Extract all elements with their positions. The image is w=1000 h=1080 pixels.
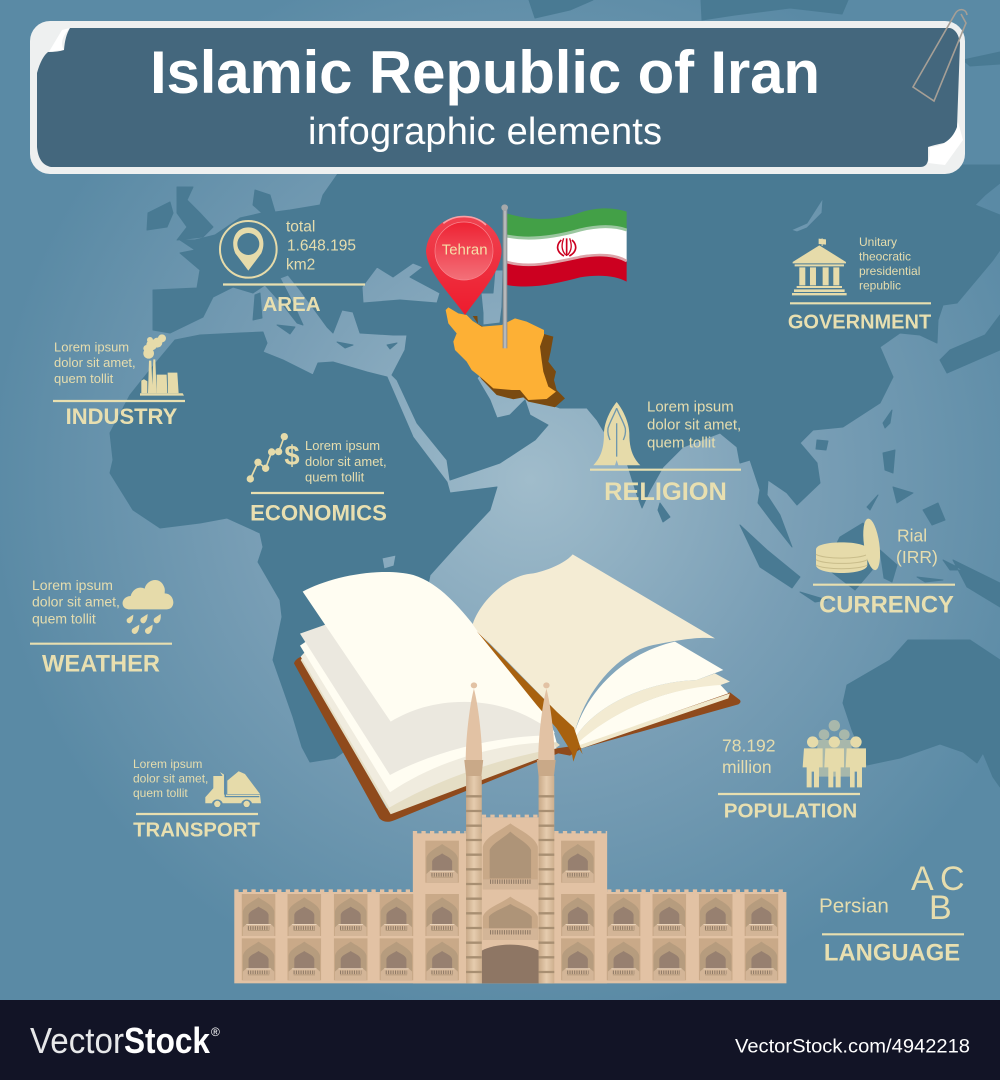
government text: theocratic <box>859 250 911 264</box>
icon: rain cloud <box>123 580 173 634</box>
subtitle: infographic elements <box>308 111 662 153</box>
icon: letters: B <box>929 889 952 927</box>
main title: Islamic Republic of Iran <box>150 39 820 106</box>
book <box>294 554 741 822</box>
icon: government building <box>792 238 847 295</box>
mosque windows <box>242 841 778 980</box>
industry text: quem tollit <box>54 371 114 386</box>
map: Asian islands <box>658 410 1000 607</box>
flag emblem <box>558 238 576 256</box>
economics text: quem tollit <box>305 470 365 484</box>
map pin: Tehran <box>426 216 502 315</box>
industry text: Lorem ipsum <box>54 340 129 354</box>
population block <box>718 720 866 822</box>
transport text: dolor sit amet, <box>133 772 208 786</box>
map: Australia <box>843 640 1000 787</box>
economics block <box>247 433 387 526</box>
world map <box>110 0 1000 787</box>
economics text: dolor sit amet, <box>305 454 387 469</box>
area text: 1.648.195 <box>287 238 356 254</box>
right top page <box>473 554 715 732</box>
religion heading: RELIGION <box>604 478 727 506</box>
mosque walls <box>234 817 786 983</box>
industry heading: INDUSTRY <box>66 404 178 429</box>
map: Japan <box>940 315 1000 373</box>
icon: growth chart and dollar: $ <box>284 440 300 471</box>
government heading: GOVERNMENT <box>788 312 931 334</box>
government text: republic <box>859 278 901 292</box>
map pin: Tehran: Tehran <box>442 242 488 259</box>
transport block <box>133 757 261 842</box>
government text: Unitary <box>859 235 897 249</box>
currency heading: CURRENCY <box>819 592 954 619</box>
language block <box>819 860 965 967</box>
transport text: Lorem ipsum <box>133 757 202 771</box>
book cover <box>294 657 741 822</box>
transport text: quem tollit <box>133 786 188 800</box>
flag pole <box>503 210 507 348</box>
map: land above the banner <box>529 0 1000 66</box>
icon: growth chart and dollar <box>247 433 300 483</box>
flag and pole <box>501 204 627 348</box>
currency block <box>813 518 955 619</box>
footer bar <box>0 1000 1000 1080</box>
map: Africa <box>110 332 497 762</box>
map: European and Mediterranean islands <box>147 187 397 349</box>
book spine ribbon <box>477 631 583 762</box>
icon: factory <box>140 334 184 396</box>
VectorStock logo: Vector <box>30 1020 124 1061</box>
left top page <box>303 572 555 733</box>
title banner <box>30 10 967 174</box>
economics text: Lorem ipsum <box>305 438 380 453</box>
language text: Persian <box>819 895 889 918</box>
industry block <box>53 334 185 429</box>
area block <box>220 218 365 316</box>
icon: letters: A <box>911 860 934 898</box>
religion text: quem tollit <box>647 434 716 452</box>
area text: total <box>286 218 315 236</box>
icon: dump truck <box>205 771 261 808</box>
image id: VectorStock.com/4942218 <box>735 1036 970 1058</box>
industry text: dolor sit amet, <box>54 355 136 370</box>
VectorStock logo <box>30 1020 220 1061</box>
icon: people <box>803 720 866 787</box>
economics heading: ECONOMICS <box>250 500 387 526</box>
population text: 78.192 <box>722 736 776 756</box>
transport heading: TRANSPORT <box>133 820 260 842</box>
weather text: dolor sit amet, <box>32 594 120 610</box>
Iran map <box>446 307 565 407</box>
weather heading: WEATHER <box>42 652 160 678</box>
government block <box>788 235 931 334</box>
VectorStock logo: Stock <box>124 1020 211 1061</box>
currency text: (IRR) <box>896 547 938 567</box>
currency text: Rial <box>897 526 927 546</box>
language heading: LANGUAGE <box>824 940 960 967</box>
population heading: POPULATION <box>724 799 857 822</box>
religion block <box>590 398 741 506</box>
flag of Iran <box>507 208 627 286</box>
icon: praying hands <box>593 402 640 465</box>
population text: million <box>722 757 772 777</box>
area heading: AREA <box>262 293 321 316</box>
map: Eurasia <box>153 165 1000 547</box>
central arches <box>482 823 539 983</box>
mosque <box>234 682 786 983</box>
minarets <box>464 682 556 983</box>
government text: presidential <box>859 264 920 278</box>
icon: letters: C <box>940 860 965 898</box>
right page stack <box>577 693 730 748</box>
left page stack <box>301 625 560 814</box>
icon: paper clip <box>913 10 967 101</box>
religion text: Lorem ipsum <box>647 398 734 416</box>
icon: area pin <box>220 221 277 278</box>
icon: coins <box>816 518 883 573</box>
area text: km2 <box>286 256 315 274</box>
weather block <box>30 577 173 678</box>
VectorStock logo: ® <box>211 1025 220 1039</box>
weather text: quem tollit <box>32 610 96 626</box>
weather text: Lorem ipsum <box>32 577 113 593</box>
religion text: dolor sit amet, <box>647 416 741 434</box>
icon: letters <box>911 860 965 927</box>
